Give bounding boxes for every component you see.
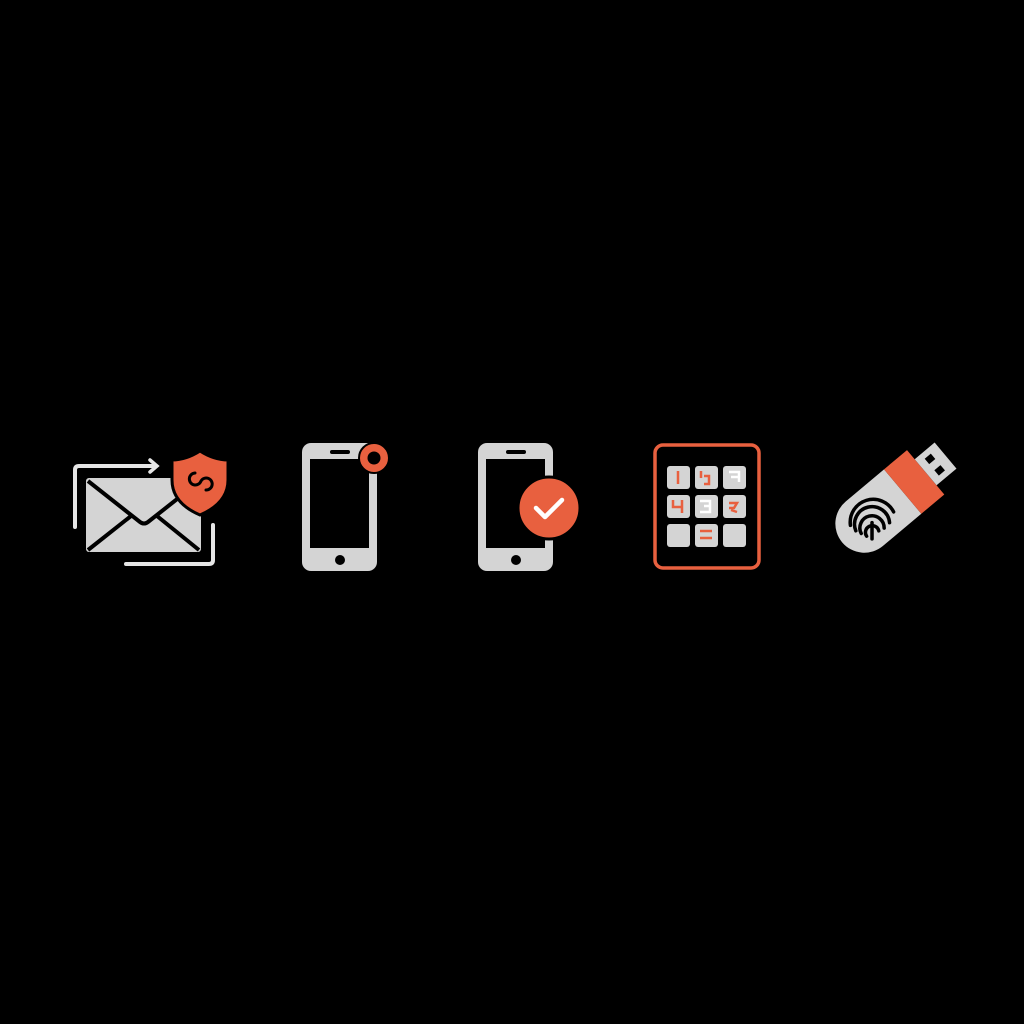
notification dot: [359, 443, 389, 473]
envelope: [86, 478, 201, 552]
shield: [172, 451, 228, 515]
icon: USB fingerprint key: [824, 433, 965, 566]
icon: phone with notification: [302, 443, 389, 571]
fingerprint: [850, 499, 894, 539]
icon: phone with check: [478, 443, 580, 571]
bracket bottom-right: [126, 525, 213, 564]
icon: email with shield: [75, 451, 228, 564]
icon: keypad token: [655, 445, 759, 568]
check badge: [518, 477, 580, 539]
arrow bracket top-left: [75, 466, 154, 527]
